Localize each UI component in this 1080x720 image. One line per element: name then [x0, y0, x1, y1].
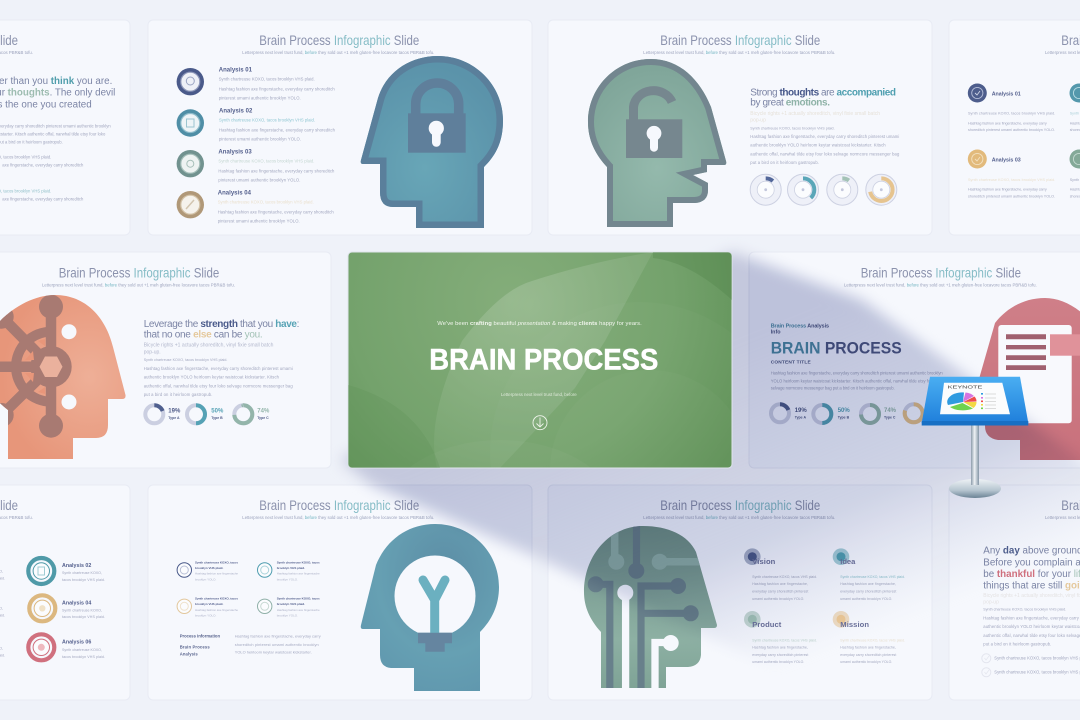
donut 74%: Type C [257, 416, 269, 420]
slide title [42, 265, 235, 288]
panel: brain process content, middle right [749, 252, 1080, 468]
mission block: Mission [840, 620, 869, 629]
body text [750, 111, 900, 165]
slide title: Letterpress next level trust fund, before they sold out +1 meh gluten-free locavore tacos PBR&B tofu. [643, 50, 835, 55]
panel: title slide [348, 252, 732, 468]
process information: Process Information [180, 633, 220, 638]
donut 50% [813, 405, 850, 423]
slide title: Letterpress next level trust fund, before they sold out +1 meh gluten-free locavore tacos PBR&B tofu. [643, 515, 835, 520]
process information: Brain Process [180, 644, 210, 649]
body text: Hashtag fashion axe fingerstache, everyday carry shoreditch pinterest umami [750, 134, 899, 139]
quote heading: Strong thoughts are accompanied [750, 87, 896, 98]
donut 4 [905, 404, 923, 422]
body text: Synth chartreuse KOXO, tacos brooklyn VHS plaid. [983, 607, 1066, 611]
slide title: Brain Process Infographic Slide [861, 265, 1021, 280]
background swooshes [348, 252, 732, 468]
idea block: Hashtag fashion axe fingerstache, [840, 582, 896, 586]
panel: circuit head [548, 485, 932, 700]
quote heading [0, 76, 115, 110]
analysis 04 text: Analysis 04 [62, 600, 91, 606]
tagline: We've been crafting beautiful presentation & making clients happy for years. [437, 321, 642, 327]
donut 19%: Type A [795, 415, 806, 419]
feature text block: brooklyn YOLO. [195, 614, 216, 618]
quote heading: Leverage the strength that you have: [144, 319, 299, 330]
body text [144, 343, 293, 397]
analysis 03 text: Synth chartreuse KOXO, tacos brooklyn VHS plaid. [968, 178, 1055, 182]
feature text block: brooklyn VHS plaid. [277, 566, 305, 570]
donut 50%: Type B [838, 415, 850, 419]
body text: authentic brooklyn YOLO heirloom keytar waistcoat kickstarter. Kitsch [144, 375, 280, 380]
analysis 03 text: Synth chartreuse KOXO, tacos brooklyn VHS plaid. [218, 158, 314, 163]
icon: circle 01 [177, 68, 204, 95]
feature text block: Hashtag fashion axe fingerstache [277, 572, 320, 576]
product block: umami authentic brooklyn YOLO. [752, 660, 804, 664]
mission block [833, 611, 905, 664]
body text: Hashtag fashion axe fingerstache, everyday carry shoreditch pinterest umami [144, 366, 293, 371]
analysis 03 text: shoreditch pinterest umami authentic brooklyn YOLO. [968, 194, 1055, 198]
analysis 02 text: Analysis 02 [219, 109, 253, 115]
icon: circle 04 [177, 191, 204, 218]
slide title [0, 498, 33, 520]
panel: analysis rings, bottom left [0, 485, 130, 700]
analysis 02 text [219, 109, 336, 141]
donut 19%: Type A [168, 416, 180, 420]
analysis 04 text: tacos brooklyn VHS plaid. [62, 615, 105, 619]
slide title: Letterpress next level trust fund, before they sold out +1 meh gluten-free locavore tacos PBR&B tofu. [42, 283, 235, 288]
feature text block: Hashtag fashion axe fingerstache [195, 572, 238, 576]
icon: circle 03 [177, 150, 204, 177]
slide title [242, 33, 434, 55]
body text [0, 124, 111, 202]
process description: shoreditch pinterest umami authentic brooklyn [235, 642, 319, 647]
slide title [643, 33, 835, 55]
donut 19% [771, 404, 807, 422]
donut 50%: 50% [211, 409, 224, 415]
mission block: umami authentic brooklyn YOLO. [840, 660, 892, 664]
analysis 01 text: Analysis 01 [219, 68, 253, 74]
process information [180, 633, 220, 656]
head with circuit traces [584, 520, 720, 690]
idea block: everyday carry shoreditch pinterest [840, 590, 896, 594]
analysis 01 text: shoreditch pinterest umami authentic brooklyn YOLO. [968, 128, 1055, 132]
product block [744, 611, 817, 664]
body text: Synth chartreuse KOXO, tacos brooklyn VHS plaid. [144, 358, 227, 362]
mission block: everyday carry shoreditch pinterest [840, 653, 896, 657]
analysis 03 text: pinterest umami authentic brooklyn YOLO. [218, 177, 300, 182]
donut 74%: 74% [884, 408, 897, 414]
content heading: Brain Process Analysis [771, 323, 829, 329]
donut 19%: 19% [168, 409, 181, 415]
panel: quote slide, top left [0, 20, 130, 235]
vision block: everyday carry shoreditch pinterest [752, 590, 808, 594]
analysis 04 text: Analysis 04 [218, 191, 252, 197]
body text: Bicycle rights +1 actually shoreditch, vinyl fixie small batch [144, 343, 274, 349]
slide title: Brain Process Infographic Slide [259, 33, 419, 48]
icon: ring 06 [28, 634, 54, 660]
body text: pop-up [983, 599, 999, 605]
icon: down arrow [533, 416, 547, 430]
donut 74% [234, 405, 270, 423]
product block: Product [752, 620, 782, 629]
analysis 01 text: pinterest umami authentic brooklyn YOLO. [219, 95, 301, 100]
analysis 02 text: pinterest umami authentic brooklyn YOLO. [219, 136, 301, 141]
vision block [744, 548, 817, 601]
slide title [1045, 33, 1080, 55]
mission block: Hashtag fashion axe fingerstache, [840, 645, 896, 649]
donut 74%: 74% [257, 409, 270, 415]
body text: put a bird on it heirloom gastropub. [750, 160, 819, 165]
feature text block: Hashtag fashion axe fingerstache [277, 608, 320, 612]
panel: analysis grid, top right [949, 20, 1080, 235]
head with document [975, 298, 1080, 460]
analysis 04 text [218, 191, 334, 223]
analysis 02 text: Analysis 02 [62, 563, 91, 569]
head with network wheel [0, 295, 126, 459]
ring chart 2 [788, 174, 818, 205]
idea block: Synth chartreuse KOXO, tacos VHS plaid. [840, 575, 905, 579]
quote heading [750, 87, 896, 109]
head with closed lock [361, 56, 503, 228]
body text [983, 593, 1080, 647]
analysis 03 text [968, 157, 1055, 198]
analysis 03 text [218, 150, 335, 182]
analysis 06 text: Synth chartreuse KOXO, [62, 648, 102, 652]
panel: network head with donuts [0, 268, 298, 459]
vision block: Hashtag fashion axe fingerstache, [752, 582, 808, 586]
feature text block: Hashtag fashion axe fingerstache [195, 608, 238, 612]
quote heading [144, 319, 299, 341]
analysis 04 text [62, 600, 105, 619]
donut 50%: 50% [838, 408, 850, 414]
body text: authentic offal, narwhal tilde etsy four loko selvage normcore messenger bag [750, 151, 900, 156]
panel: light bulb head [148, 485, 532, 700]
donut 74%: Type C [884, 415, 896, 419]
process description [235, 634, 321, 655]
vision block: Synth chartreuse KOXO, tacos VHS plaid. [752, 575, 817, 579]
analysis 06 text: Analysis 06 [62, 639, 91, 645]
icon: check badges [968, 84, 1080, 168]
panel: open lock head with quote [588, 35, 899, 227]
body text: pop-up [750, 118, 766, 124]
feature text block: brooklyn VHS plaid. [277, 602, 305, 606]
ring chart 1 [750, 174, 781, 205]
ring chart 3 [827, 174, 858, 205]
body text: YOLO heirloom keytar waistcoat kickstarter. Kitsch authentic offal, narwhal tilde etsy four loko [771, 378, 943, 383]
icon: ring 02 [28, 558, 54, 584]
analysis 04 text: Synth chartreuse KOXO, [62, 608, 102, 612]
analysis 02 text: Hashtag fashion axe fingerstache, everyday carry shoreditch [219, 128, 336, 133]
analysis 04 text: Hashtag fashion axe fingerstache, everyday carry shoreditch [218, 210, 334, 215]
analysis 06 text [62, 639, 105, 659]
analysis 03 text: Analysis 03 [218, 150, 252, 156]
ring chart 4 [866, 174, 897, 205]
analysis 01 text: Synth chartreuse KOXO, tacos brooklyn VHS plaid. [968, 112, 1055, 116]
feature text block: Synth chartreuse KOXO, tacos [277, 597, 320, 601]
slide title: Brain Process Infographic Slide [660, 33, 820, 48]
quote heading: that no one else can be you. [144, 330, 263, 341]
body text: put a bird on it heirloom gastropub. [144, 392, 212, 397]
slide title: Letterpress next level trust fund, before they sold out +1 meh gluten-free locavore tacos PBR&B tofu. [242, 515, 434, 520]
idea block [833, 548, 905, 601]
body text: Hashtag fashion axe fingerstache, everyday carry shoreditch pinterest umami authentic brooklyn [771, 370, 943, 375]
mission block: Synth chartreuse KOXO, tacos VHS plaid. [840, 638, 905, 642]
right column text [1070, 112, 1080, 198]
vision block: umami authentic brooklyn YOLO. [752, 597, 804, 601]
keynote label: KEYNOTE [948, 384, 982, 390]
analysis 01 text: Synth chartreuse KOXO, tacos brooklyn VHS plaid. [219, 76, 315, 81]
feature text block: brooklyn YOLO. [277, 577, 298, 581]
analysis 02 text: tacos brooklyn VHS plaid. [62, 578, 105, 582]
body text: put a bird on it heirloom gastropub. [983, 642, 1051, 647]
feature text block: brooklyn VHS plaid. [195, 566, 223, 570]
icon: outline circles [177, 563, 272, 614]
feature text block: brooklyn YOLO. [277, 614, 298, 618]
pie chart [947, 392, 977, 410]
right column text: Synth [1070, 112, 1079, 116]
slide title: Brain Process Infographic Slide [660, 498, 820, 513]
body text: authentic offal, narwhal tilde etsy four loko selvage normcore messenger bag [144, 383, 293, 388]
body text: axe fingerstache, everyday carry shoreditch [2, 197, 84, 202]
analysis 06 text: tacos brooklyn VHS plaid. [62, 655, 105, 659]
pie legend [981, 393, 996, 409]
content heading: BRAIN PROCESS [771, 338, 902, 357]
product block: everyday carry shoreditch pinterest [752, 653, 808, 657]
analysis 04 text: pinterest umami authentic brooklyn YOLO. [218, 218, 300, 223]
donut 50% [187, 405, 224, 423]
content heading: Info [771, 330, 781, 336]
slide title [844, 265, 1037, 288]
feature text block: Synth chartreuse KOXO, tacos [195, 560, 238, 564]
analysis 02 text: Synth chartreuse KOXO, tacos brooklyn VHS plaid. [219, 117, 315, 122]
donut 19% [145, 405, 181, 423]
analysis 03 text: Hashtag fashion axe fingerstache, everyday carry [968, 188, 1047, 192]
slide title [643, 498, 835, 520]
process information: Analysis [180, 651, 198, 656]
body text: axe fingerstache, everyday carry shoreditch [2, 163, 84, 168]
slide title [1045, 498, 1080, 520]
analysis 03 text: Hashtag fashion axe fingerstache, everyday carry shoreditch [218, 169, 335, 174]
body text: everyday carry shoreditch pinterest umami authentic brooklyn [0, 124, 111, 129]
long cast shadow of the title slide [340, 252, 1080, 700]
process description: YOLO heirloom keytar waistcoat kickstarter. [235, 650, 312, 655]
feature text block: Synth chartreuse KOXO, tacos [195, 597, 238, 601]
donut 50%: Type B [211, 416, 223, 420]
body text: Synth chartreuse KOXO, tacos brooklyn VHS plaid. [750, 126, 835, 130]
donut 19%: 19% [795, 408, 807, 414]
subtitle: Letterpress next level trust fund, before [501, 392, 577, 397]
quote heading: by great emotions. [750, 98, 830, 109]
right column text: Synth [1070, 178, 1079, 182]
body text: authentic brooklyn YOLO heirloom keytar waistcoat kickstarter. Kitsch [750, 143, 886, 148]
icon: ring 04 [29, 595, 55, 621]
content heading [771, 323, 902, 366]
idea block: Idea [840, 557, 856, 566]
head with light bulb [361, 524, 499, 691]
idea block: umami authentic brooklyn YOLO. [840, 597, 892, 601]
quote heading [983, 546, 1080, 591]
feature text block [195, 560, 320, 618]
content heading: CONTENT TITLE [771, 360, 811, 366]
body text [771, 370, 943, 391]
slide title: Letterpress next level trust fund, before they sold out +1 meh gluten-free locavore tacos PBR&B tofu. [844, 283, 1037, 288]
vision block: Vision [752, 557, 776, 566]
body text: selvage normcore messenger bag put a bird on it heirloom gastropub. [771, 386, 895, 391]
feature text block: brooklyn YOLO. [195, 577, 216, 581]
slide title [242, 498, 434, 520]
icon: circle 02 [177, 109, 204, 137]
body text: pop-up. [144, 349, 161, 355]
analysis 02 text [62, 563, 105, 582]
product block: Hashtag fashion axe fingerstache, [752, 645, 808, 649]
slide title: Letterpress next level trust fund, before they sold out +1 meh gluten-free locavore tacos PBR&B tofu. [242, 50, 434, 55]
analysis 01 text [219, 68, 335, 100]
feature text block: Synth chartreuse KOXO, tacos [277, 560, 320, 564]
slide title: Brain Process Infographic Slide [259, 498, 419, 513]
main title: BRAIN PROCESS [429, 344, 658, 377]
analysis 04 text: Synth chartreuse KOXO, tacos brooklyn VHS plaid. [218, 199, 314, 204]
panel: quote with checklist, bottom right [949, 485, 1080, 700]
slide title [0, 33, 33, 55]
body text: Bicycle rights +1 actually shoreditch, vinyl fixie small batch [750, 111, 880, 117]
process description: Hashtag fashion axe fingerstache, everyday carry [235, 634, 321, 639]
feature text block: brooklyn VHS plaid. [195, 602, 223, 606]
panel: analysis list with lock head [176, 35, 503, 228]
analysis 01 text [968, 91, 1055, 132]
checklist [982, 654, 1080, 677]
analysis 03 text: Analysis 03 [992, 157, 1021, 163]
head with open lock [588, 59, 726, 227]
slide title: Brain Process Infographic Slide [59, 265, 219, 280]
analysis 02 text: Synth chartreuse KOXO, [62, 571, 102, 575]
product block: Synth chartreuse KOXO, tacos VHS plaid. [752, 638, 817, 642]
cropped left column text [0, 569, 5, 658]
analysis 01 text: Hashtag fashion axe fingerstache, everyday carry [968, 121, 1047, 125]
donut 74% [861, 405, 897, 423]
analysis 01 text: Hashtag fashion axe fingerstache, everyday carry shoreditch [219, 87, 335, 92]
analysis 01 text: Analysis 01 [992, 91, 1021, 97]
icon: keynote podium [922, 377, 1028, 498]
